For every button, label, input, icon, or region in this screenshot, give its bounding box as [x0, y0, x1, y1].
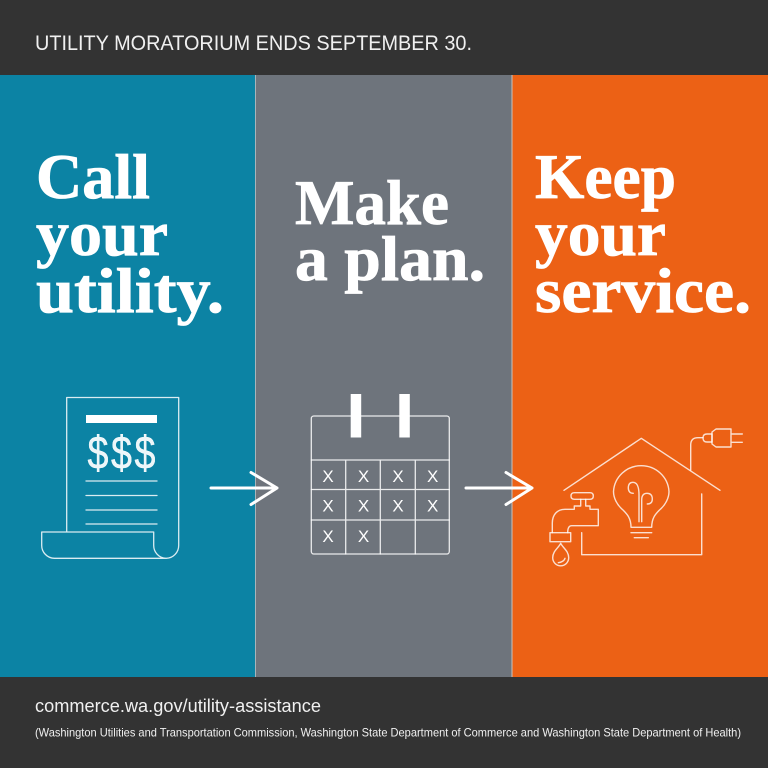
heading: keep your service: [535, 141, 751, 326]
icon: calendar: X: [427, 496, 438, 516]
icon: calendar: X: [358, 527, 369, 546]
heading: call your utility: your: [36, 198, 168, 269]
heading: make a plan: a plan.: [295, 223, 485, 294]
icon: calendar: X: [358, 496, 369, 516]
heading: keep your service: your: [535, 198, 666, 269]
icon: utility bill: [42, 398, 179, 558]
heading: keep your service: Keep: [535, 141, 676, 212]
heading: keep your service: service.: [535, 255, 751, 326]
icon: calendar: X: [392, 496, 404, 516]
heading: make a plan: [295, 167, 485, 294]
icon: calendar: X: [322, 496, 334, 516]
header band: [0, 0, 768, 75]
icon: utility bill: $$$: [88, 427, 155, 478]
footer band: [0, 677, 768, 768]
panel: keep your service: [512, 75, 768, 677]
footer band: commerce.wa.gov/utility-assistance: [35, 696, 321, 716]
icon: calendar: X: [322, 467, 334, 486]
panel dividers: [255, 75, 512, 677]
heading: make a plan: Make: [295, 167, 449, 238]
arrow: bill to calendar: [211, 472, 277, 504]
icon: calendar: X: [427, 467, 438, 486]
heading: call your utility: Call: [36, 141, 150, 212]
arrow: calendar to house: [466, 472, 532, 504]
icon: calendar: X: [322, 527, 334, 546]
icon: house with bulb, faucet and plug: [550, 429, 742, 566]
heading: call your utility: utility.: [36, 255, 224, 326]
icon: calendar: X: [358, 467, 369, 486]
heading: call your utility: [36, 141, 224, 326]
icon: calendar: [311, 394, 449, 554]
panel: make a plan: [256, 75, 512, 677]
panel: call your utility: [0, 75, 256, 677]
header band: UTILITY MORATORIUM ENDS SEPTEMBER 30.: [35, 31, 472, 55]
icon: calendar: X: [392, 467, 404, 486]
